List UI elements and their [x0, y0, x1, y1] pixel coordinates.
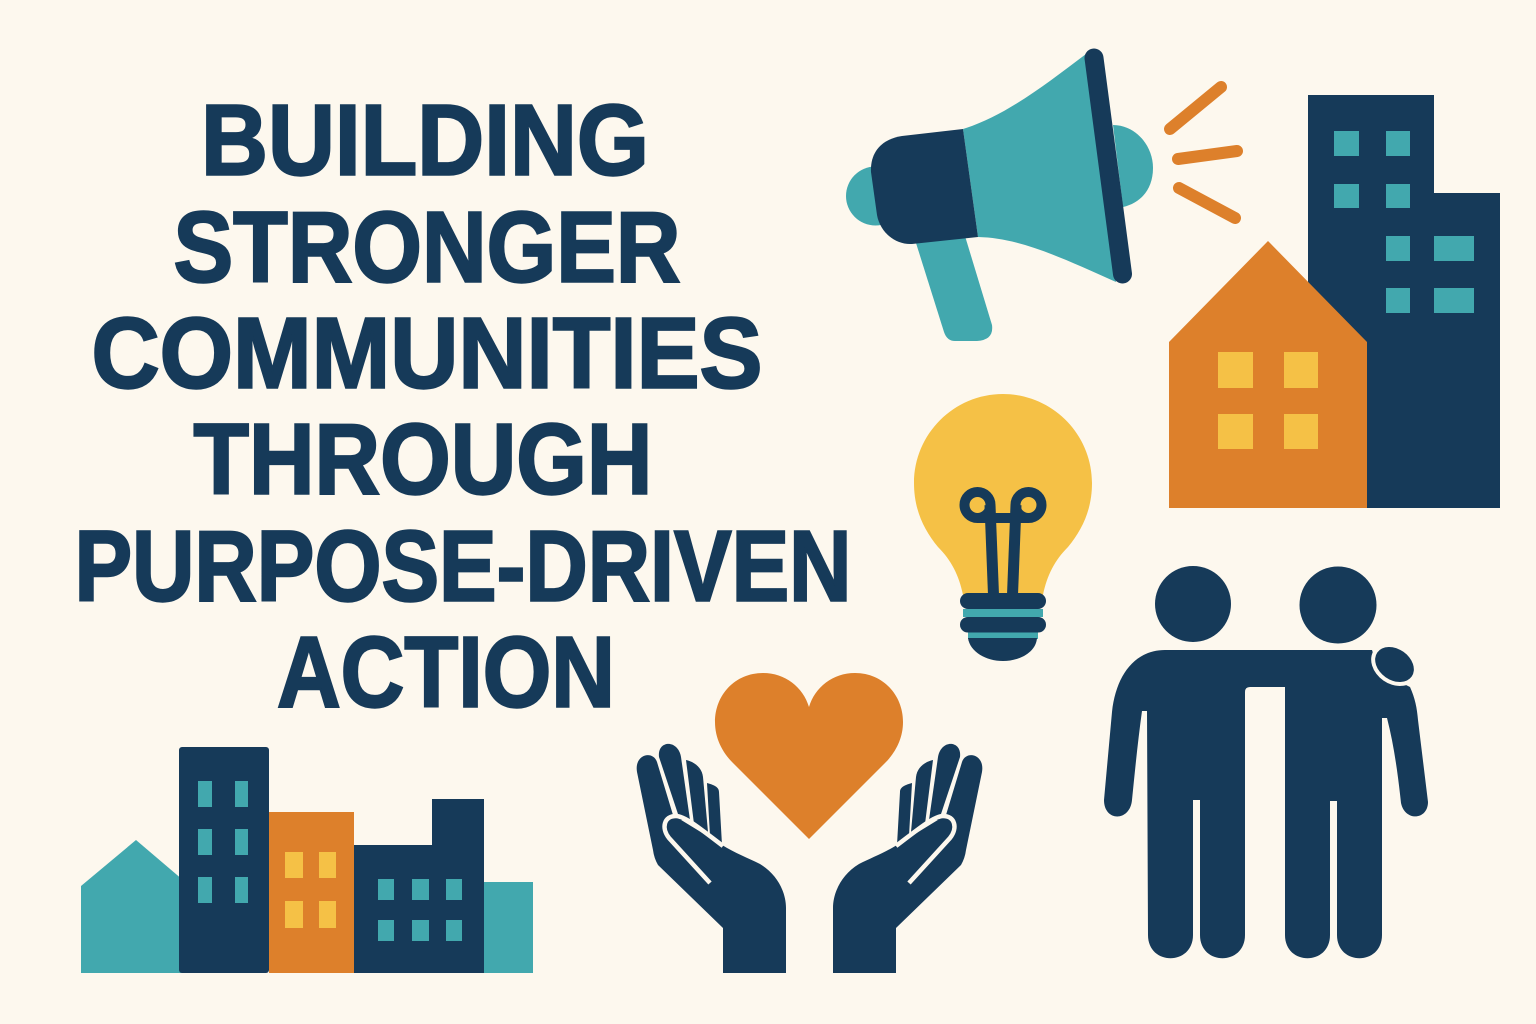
title: THROUGH: [194, 404, 652, 516]
title: PURPOSE-DRIVEN: [74, 510, 852, 622]
title: STRONGER: [174, 192, 680, 304]
title: COMMUNITIES: [92, 298, 762, 410]
icon: light bulb: [914, 394, 1092, 661]
title: [74, 84, 852, 728]
icon: house and tower: [1169, 95, 1500, 508]
icon: left hand: [637, 744, 786, 973]
icon: two people: [1104, 566, 1428, 958]
icon: sound lines: [1170, 87, 1237, 218]
title: ACTION: [277, 616, 615, 728]
icon: city skyline: [81, 747, 533, 973]
icon: heart: [715, 673, 903, 839]
icon: right hand: [833, 744, 982, 973]
title: BUILDING: [201, 84, 649, 196]
icon: megaphone: [846, 54, 1153, 341]
